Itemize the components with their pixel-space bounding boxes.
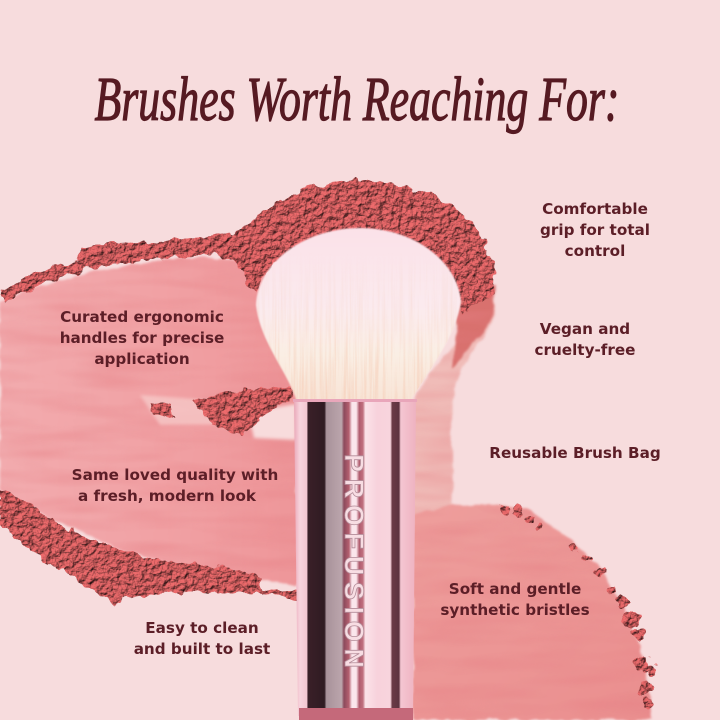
text: soft bristles: synthetic bristles: [440, 601, 590, 619]
ferrule: [294, 400, 416, 716]
text: comfortable grip: Comfortable: [542, 200, 648, 218]
handle: [299, 708, 413, 720]
text: easy to clean: Easy to clean: [145, 619, 259, 637]
text: same quality: a fresh, modern look: [78, 487, 257, 505]
powder crumble: bottom left: [0, 490, 296, 604]
powder crumble: top arc: [0, 181, 494, 312]
text: curated handles: Curated ergonomic: [60, 308, 224, 326]
text: comfortable grip: control: [565, 242, 625, 260]
brand wordmark: PROFUSION: [339, 454, 369, 668]
blush smear: bottom right: [412, 504, 652, 720]
smear gap: [248, 404, 296, 440]
text: curated handles: application: [94, 350, 190, 368]
powder crumble: bottom right specks: [500, 504, 658, 709]
text: soft bristles: Soft and gentle: [449, 580, 581, 598]
text: easy to clean: and built to last: [134, 640, 270, 658]
smear pale patch: [140, 395, 245, 425]
brush: [250, 228, 465, 720]
powder crumble: middle small bits: [150, 402, 176, 418]
blush smear: left: [0, 257, 298, 586]
ferrule rim: [293, 399, 417, 402]
text: brush bag: Reusable Brush Bag: [489, 444, 661, 462]
powder crumble: middle: [194, 388, 292, 434]
text: same quality: Same loved quality with: [72, 466, 278, 484]
text: curated handles: handles for precise: [60, 329, 224, 347]
blush smear: right column: [412, 286, 494, 520]
text: comfortable grip: grip for total: [540, 221, 650, 239]
bristles: [250, 228, 465, 405]
text: vegan: Vegan and: [540, 320, 630, 338]
text: vegan: cruelty-free: [535, 341, 635, 359]
